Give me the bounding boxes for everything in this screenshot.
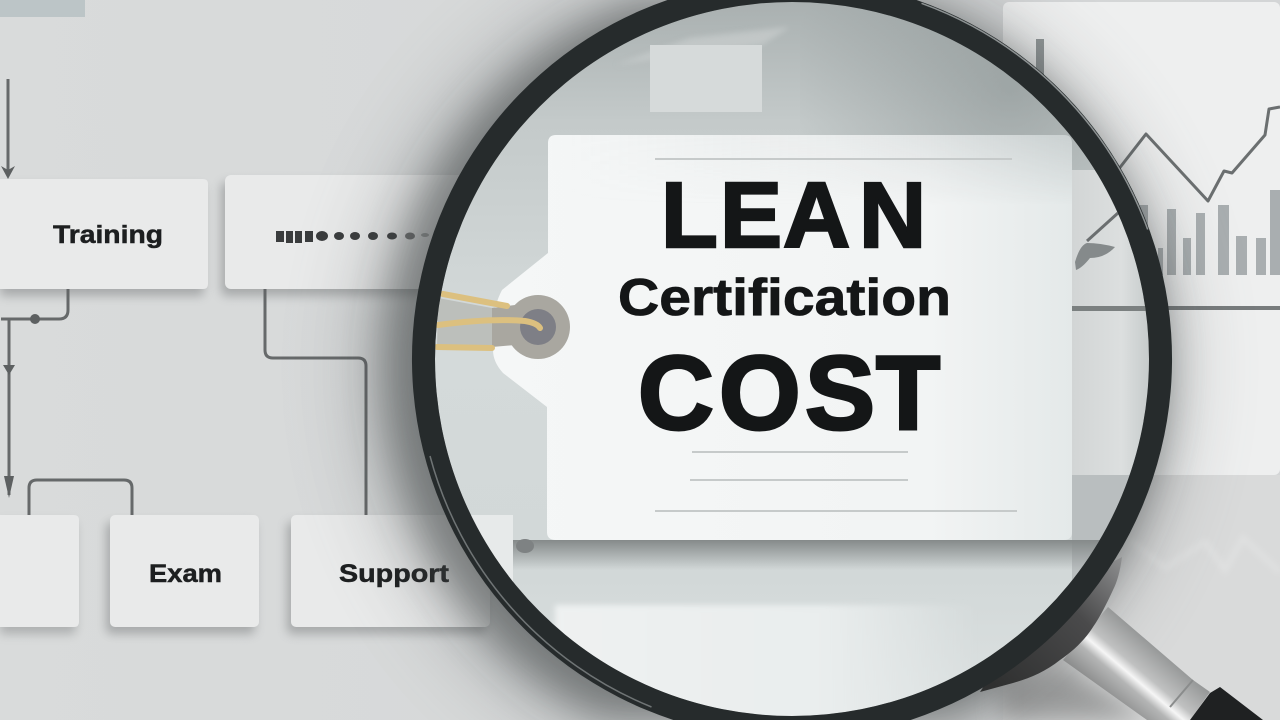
box: obscured label bbox=[221, 175, 465, 296]
heading: Certification: Certification bbox=[618, 269, 951, 327]
handle shaft bbox=[1063, 607, 1210, 720]
ring highlight upper right bbox=[922, 3, 1148, 229]
box: cut-off item bbox=[0, 515, 79, 634]
ring body bbox=[412, 0, 1172, 720]
lens: top light streak bbox=[639, 28, 782, 60]
box: support: Support bbox=[339, 560, 450, 588]
box: exam: Exam bbox=[149, 560, 222, 588]
handle groove bbox=[1170, 680, 1193, 707]
heading: COST: COST bbox=[638, 335, 940, 452]
tag eyelet neck bbox=[492, 305, 515, 347]
panel: chart backdrop bbox=[1003, 2, 1280, 720]
magnifier handle bbox=[980, 557, 1263, 720]
lens: under-tag shadow bbox=[513, 540, 1100, 567]
box: training bbox=[0, 179, 208, 296]
box: exam bbox=[106, 515, 259, 634]
lens: refracted chart line bbox=[1087, 213, 1118, 241]
tag body bbox=[493, 135, 1072, 540]
box: training: Training bbox=[53, 221, 163, 249]
line chart bbox=[1118, 107, 1280, 201]
lens: bottom light patch bbox=[554, 604, 916, 716]
lens: top light patch bbox=[650, 45, 762, 112]
chart axis bbox=[1150, 306, 1280, 310]
handle collar bbox=[980, 557, 1122, 692]
garbled label marks bbox=[276, 231, 429, 243]
lens: smudge bbox=[516, 539, 534, 553]
lens: right backdrop bbox=[1072, 170, 1149, 475]
flow connectors bbox=[1, 79, 366, 515]
magnifier ring bbox=[412, 0, 1172, 720]
handle grip bbox=[1190, 687, 1263, 720]
connector markers bbox=[1, 166, 40, 498]
lens: lower right backdrop bbox=[1072, 475, 1130, 580]
box: support bbox=[287, 515, 490, 634]
lens: top right shade bbox=[845, 17, 1094, 170]
tag string backing bbox=[437, 298, 492, 347]
tag strings bbox=[437, 294, 540, 348]
ring highlight lower left bbox=[430, 456, 652, 707]
heading: LEAN: LEAN bbox=[661, 163, 926, 267]
handle shadow bbox=[1000, 665, 1150, 720]
magnifier close shadow bbox=[384, 0, 1168, 720]
tag rules bbox=[655, 159, 1017, 511]
magnifier wide shadow bbox=[360, 0, 1180, 720]
lens: refracted chart blob bbox=[1075, 243, 1115, 270]
tag top shade bbox=[798, 135, 1072, 184]
tag eyelet bbox=[506, 295, 570, 359]
tag eyelet hole bbox=[520, 309, 556, 345]
top left strip bbox=[0, 0, 85, 17]
magnifier lens bbox=[420, 0, 1170, 720]
bar chart bbox=[1036, 39, 1280, 275]
tag bbox=[437, 135, 1072, 540]
lens: refracted axis bbox=[1072, 306, 1150, 311]
lens: support box edge bbox=[471, 515, 513, 582]
